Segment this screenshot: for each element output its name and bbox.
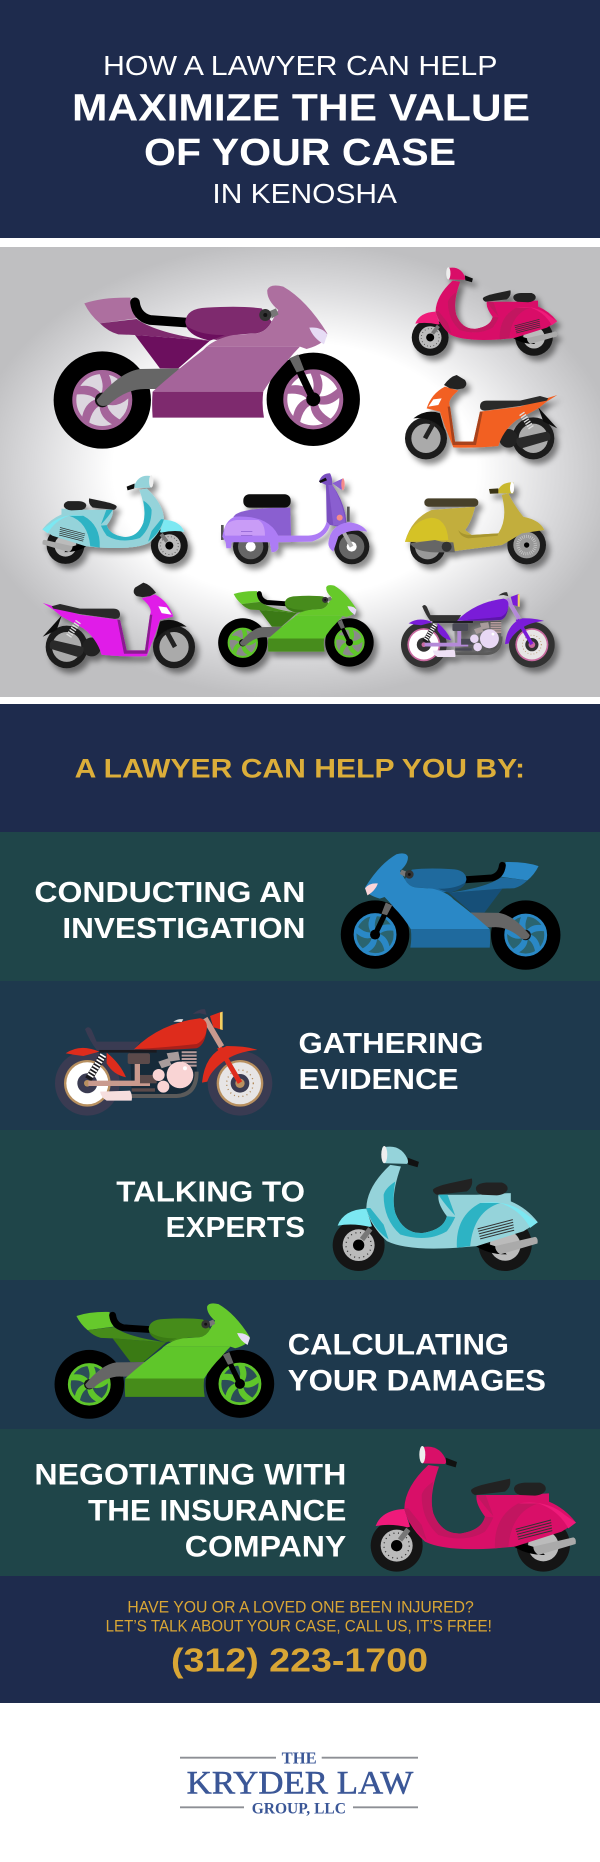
label: talking to experts: TALKING TO	[116, 1176, 305, 1208]
text: call to action: HAVE YOU OR A LOVED ONE BEEN INJURED?	[127, 1598, 474, 1616]
panel: negotiating with the insurance company	[0, 1429, 600, 1576]
label: negotiating with the insurance company: NEGOTIATING WITH	[34, 1459, 346, 1492]
icon: pink scooter large	[371, 1446, 576, 1572]
text: call to action: LET’S TALK ABOUT YOUR CASE, CALL US, IT’S FREE!	[106, 1618, 492, 1636]
title line: in Kenosha: IN KENOSHA	[212, 178, 397, 209]
title line: of your case: OF YOUR CASE	[144, 132, 456, 174]
label: conducting an investigation	[34, 877, 305, 945]
phone number: (312) 223-1700	[171, 1641, 428, 1678]
panel: title header	[0, 0, 600, 238]
icon: orange scooter	[405, 375, 557, 459]
icon: purple cruiser	[401, 592, 555, 668]
label: calculating your damages: CALCULATING	[288, 1328, 509, 1362]
panel: motorcycle collection	[0, 247, 600, 697]
heading: a lawyer can help you by: A LAWYER CAN HELP YOU BY:	[75, 754, 525, 784]
title line: maximize the value: MAXIMIZE THE VALUE	[72, 88, 530, 130]
label: calculating your damages: YOUR DAMAGES	[288, 1364, 546, 1397]
panel: section heading	[0, 704, 600, 832]
label: gathering evidence: EVIDENCE	[298, 1064, 458, 1096]
icon: red cruiser	[55, 1009, 272, 1116]
logo: The Kryder Law Group, LLC: THE	[282, 1748, 317, 1767]
icon: pink scooter	[412, 267, 557, 356]
label: conducting an investigation: INVESTIGATION	[62, 913, 305, 945]
text: call to action	[106, 1598, 492, 1636]
label: talking to experts: EXPERTS	[166, 1212, 305, 1244]
logo: The Kryder Law Group, LLC	[180, 1748, 418, 1817]
panel: call to action	[0, 1576, 600, 1703]
icon: aqua scooter large	[333, 1146, 538, 1271]
title line: how a lawyer can help: HOW A LAWYER CAN HELP	[103, 50, 498, 81]
label: negotiating with the insurance company: COMPANY	[185, 1530, 347, 1563]
panel: conducting an investigation	[0, 832, 600, 981]
icon: lavender scooter	[221, 473, 369, 564]
panel: gathering evidence	[0, 981, 600, 1130]
icon: green sport bike	[55, 1303, 274, 1419]
label: calculating your damages	[288, 1328, 546, 1397]
icon: yellow scooter	[405, 482, 546, 564]
icon: small green sport bike	[218, 585, 374, 667]
label: gathering evidence: GATHERING	[298, 1028, 484, 1060]
icon: blue sport bike	[341, 853, 560, 970]
panel: calculating your damages	[0, 1280, 600, 1429]
label: negotiating with the insurance company	[34, 1459, 347, 1563]
icon: aqua scooter	[42, 475, 188, 564]
logo: The Kryder Law Group, LLC: GROUP, LLC	[252, 1800, 346, 1817]
label: gathering evidence	[298, 1028, 484, 1096]
logo: The Kryder Law Group, LLC: KRYDER LAW	[187, 1765, 414, 1801]
label: talking to experts	[116, 1176, 305, 1244]
icon: large purple sport bike	[54, 286, 361, 449]
label: conducting an investigation: CONDUCTING AN	[34, 877, 305, 909]
panel: talking to experts	[0, 1130, 600, 1280]
label: negotiating with the insurance company: THE INSURANCE	[88, 1494, 346, 1527]
icon: magenta scooter	[43, 583, 195, 668]
